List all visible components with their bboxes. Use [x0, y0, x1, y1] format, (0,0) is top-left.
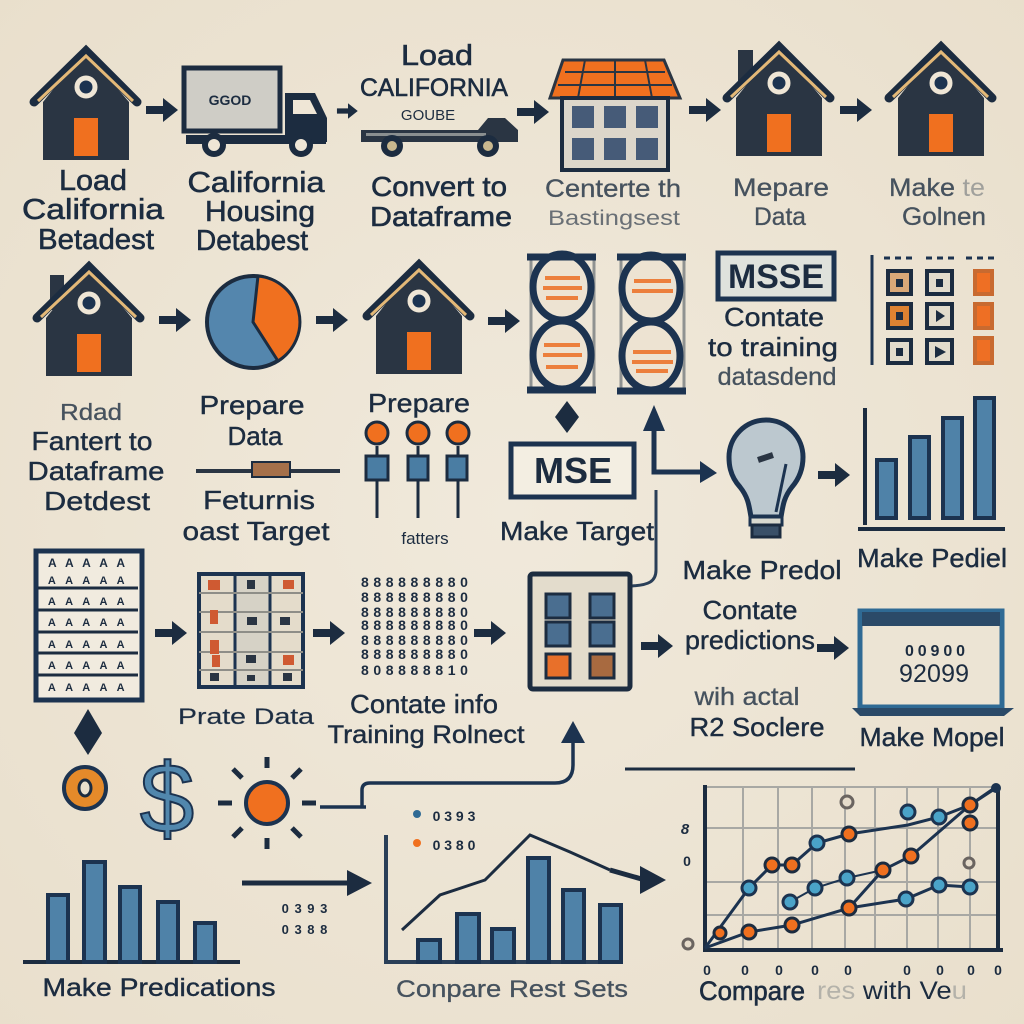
icon: lightbulb: [729, 420, 803, 537]
label: read dataframe: [28, 399, 164, 516]
label: convert to dataframe: Dataframe: [370, 201, 512, 232]
icon: feature pins: [366, 422, 469, 518]
label: with actual r2 score: R2 Soclere: [690, 712, 824, 742]
icon: table: A A A A A: [48, 596, 128, 608]
label: read dataframe: Rdad: [60, 399, 122, 425]
label: contate to training: datasdend: [718, 363, 836, 391]
icon: diamond arrow: [74, 709, 102, 755]
icon: table: A A A A A: [48, 575, 128, 587]
label: msse box: MSSE: [728, 258, 824, 296]
heading: load california: [360, 40, 508, 102]
icon: table: A A A A A: [48, 556, 128, 570]
panel: row 3 predictions: [36, 551, 1014, 752]
label: make target: Make Target: [500, 516, 655, 546]
icon: pie chart: [207, 276, 300, 368]
icon: house 5: [367, 264, 470, 374]
label: msse box: [718, 253, 834, 299]
label: centerte dataset: [545, 175, 681, 230]
heading: load california: CALIFORNIA: [360, 74, 508, 102]
label: compare test sets: Conpare Rest Sets: [396, 976, 628, 1003]
label: prepare data: Prepare: [200, 390, 304, 420]
label: feature target: [182, 485, 330, 546]
icon: laptop: 92099: [899, 660, 969, 688]
arrow: connector to top: [320, 721, 585, 807]
icon: number grid: 888888880: [361, 589, 472, 605]
label: prate data: Prate Data: [178, 704, 315, 729]
arrow: [641, 634, 673, 658]
label: contate info: Training Rolnect: [328, 721, 525, 749]
label: with actual r2 score: wih actal: [693, 683, 800, 711]
label: prepare data: Data: [754, 203, 806, 231]
icon: number grid: 888888880: [361, 617, 472, 633]
arrow: [610, 866, 666, 894]
numbers block: 0 3 9 3: [282, 901, 328, 916]
icon: mse box: [511, 444, 634, 497]
decorative title line: [625, 768, 855, 770]
icon: table: A A A A A: [48, 639, 128, 651]
chart: line comparison: 0: [967, 962, 975, 978]
icon: matrix: [872, 255, 996, 365]
label: faded features: fatters: [401, 529, 449, 548]
label: feature target: oast Target: [182, 516, 330, 546]
icon: table: [36, 551, 142, 700]
arrow: [313, 621, 345, 645]
panel: row 2 prepare data: [28, 253, 1007, 586]
arrow: [818, 463, 850, 487]
label: contate to training: [708, 302, 838, 391]
icon: house 3: [889, 46, 992, 156]
label: convert to dataframe: Convert to: [371, 171, 507, 202]
label: faded values: res with Ve u: [817, 977, 967, 1005]
icon: mse box: MSE: [534, 450, 612, 491]
icon: table orange: [199, 574, 303, 687]
chart: line comparison: 0: [811, 962, 819, 978]
chart: line comparison: [681, 783, 1003, 978]
icon: house 4: [37, 266, 140, 376]
label: convert to dataframe: [370, 171, 512, 232]
arrow: [817, 636, 849, 660]
icon: number grid: 888888880: [361, 632, 472, 648]
icon: flatbed truck: [361, 107, 518, 154]
label: california housing dataset: [188, 167, 325, 257]
icon: house 1: [34, 50, 137, 160]
label: california housing dataset: Detabest: [196, 225, 308, 257]
label: make predictions: Make Predications: [42, 974, 276, 1002]
label: make golden: [889, 174, 986, 231]
icon: number grid: 888888880: [361, 604, 472, 620]
label: prepare: Prepare: [368, 388, 470, 418]
arrow: connector up: [632, 490, 656, 586]
label: make predol: Make Predol: [682, 555, 842, 585]
chart: bars top right: [858, 398, 1005, 529]
chart: bars bottom left: [23, 862, 240, 962]
icon: laptop: [852, 611, 1014, 716]
arrow: [316, 308, 348, 332]
icon: laptop: 00900: [905, 643, 965, 660]
arrow: [337, 103, 358, 119]
heading: load california: Load: [401, 40, 473, 72]
icon: table: A A A A A: [48, 660, 128, 672]
arrow: [242, 870, 372, 896]
chart: line comparison: 0: [741, 962, 749, 978]
arrow: [146, 98, 178, 122]
label: make pediel: Make Pediel: [857, 543, 1007, 573]
icon: truck: GGOD: [209, 92, 251, 108]
label: with actual r2 score: [690, 683, 824, 742]
chart: line comparison: 0: [703, 962, 711, 978]
icon: truck: [184, 68, 327, 154]
label: prepare data: [200, 390, 304, 451]
label: prepare data: Mepare: [733, 174, 829, 202]
label: contate to training: to training: [708, 332, 838, 362]
chart: line comparison: 0: [994, 962, 1002, 978]
label: read dataframe: Fantert to: [32, 426, 152, 456]
label: prepare data: Data: [228, 421, 283, 451]
chart: combined bars and line: [386, 808, 621, 962]
label: load california dataset: [22, 165, 165, 256]
chart: combined bars and line: 0 3 8 0: [433, 837, 476, 853]
icon: dollar sign: $: [140, 743, 194, 853]
label: contate info: [328, 689, 525, 749]
chart: line comparison: 0: [844, 962, 852, 978]
label: load california dataset: Load: [59, 165, 127, 197]
chart: line comparison: 0: [683, 853, 691, 869]
icon: number grid: 808888810: [361, 662, 472, 678]
label: make golden: Golnen: [902, 203, 986, 231]
icon: number grid: 888888880: [361, 574, 472, 590]
arrow: [488, 309, 520, 333]
icon: table: A A A A A: [48, 617, 128, 629]
label: contate to training: Contate: [724, 302, 824, 332]
icon: number grid: 888888880: [361, 646, 472, 662]
chart: combined bars and line: 0 3 9 3: [433, 808, 476, 824]
chart: line comparison: 0: [775, 962, 783, 978]
label: prepare data: [733, 174, 829, 231]
icon: number grid: [361, 574, 472, 678]
label: make model: Make Mopel: [860, 722, 1004, 752]
icon: table: A A A A A: [48, 682, 128, 694]
numbers block: 0 3 8 8: [282, 922, 328, 937]
label: california housing dataset: Housing: [205, 196, 315, 228]
panel: row 4 results: [23, 709, 1003, 1006]
chart: line comparison: 0: [936, 962, 944, 978]
label: make golden: Make te: [889, 174, 985, 202]
arrow: up elbow: [643, 405, 717, 483]
arrow: [689, 98, 721, 122]
label: read dataframe: Detdest: [44, 486, 151, 516]
icon: coin: [64, 767, 106, 809]
icon: sun: [218, 757, 316, 849]
chart: line comparison: 8: [681, 821, 690, 838]
chart: line comparison: 0: [903, 962, 911, 978]
icon: diamond arrow: [555, 401, 579, 433]
arrow: [159, 308, 191, 332]
label: contate predictions: Contate: [702, 595, 798, 625]
label: contate info: Contate info: [350, 689, 498, 719]
label: feature target: Feturnis: [203, 485, 315, 515]
label: load california dataset: Betadest: [38, 224, 154, 256]
icon: house 2: [727, 46, 830, 156]
label: california housing dataset: California: [188, 167, 325, 199]
label: load california dataset: California: [22, 194, 165, 226]
label: contate predictions: [685, 595, 815, 655]
label: centerte dataset: Centerte th: [545, 175, 681, 203]
arrow: [517, 100, 549, 124]
panel: row 1 load dataset: [22, 40, 992, 257]
arrow: [474, 621, 506, 645]
label: contate predictions: predictions: [685, 625, 815, 655]
icon: building: [550, 60, 680, 170]
label: read dataframe: Dataframe: [28, 456, 164, 486]
label: compare with values: Compare: [699, 976, 805, 1006]
label: centerte dataset: Bastingsest: [548, 207, 680, 230]
arrow: [155, 621, 187, 645]
icon: hourglass pair: [527, 254, 686, 391]
icon: calculator: [530, 574, 630, 689]
arrow: [840, 98, 872, 122]
icon: line connector: [196, 462, 340, 477]
icon: flatbed truck: GOUBE: [401, 107, 455, 124]
